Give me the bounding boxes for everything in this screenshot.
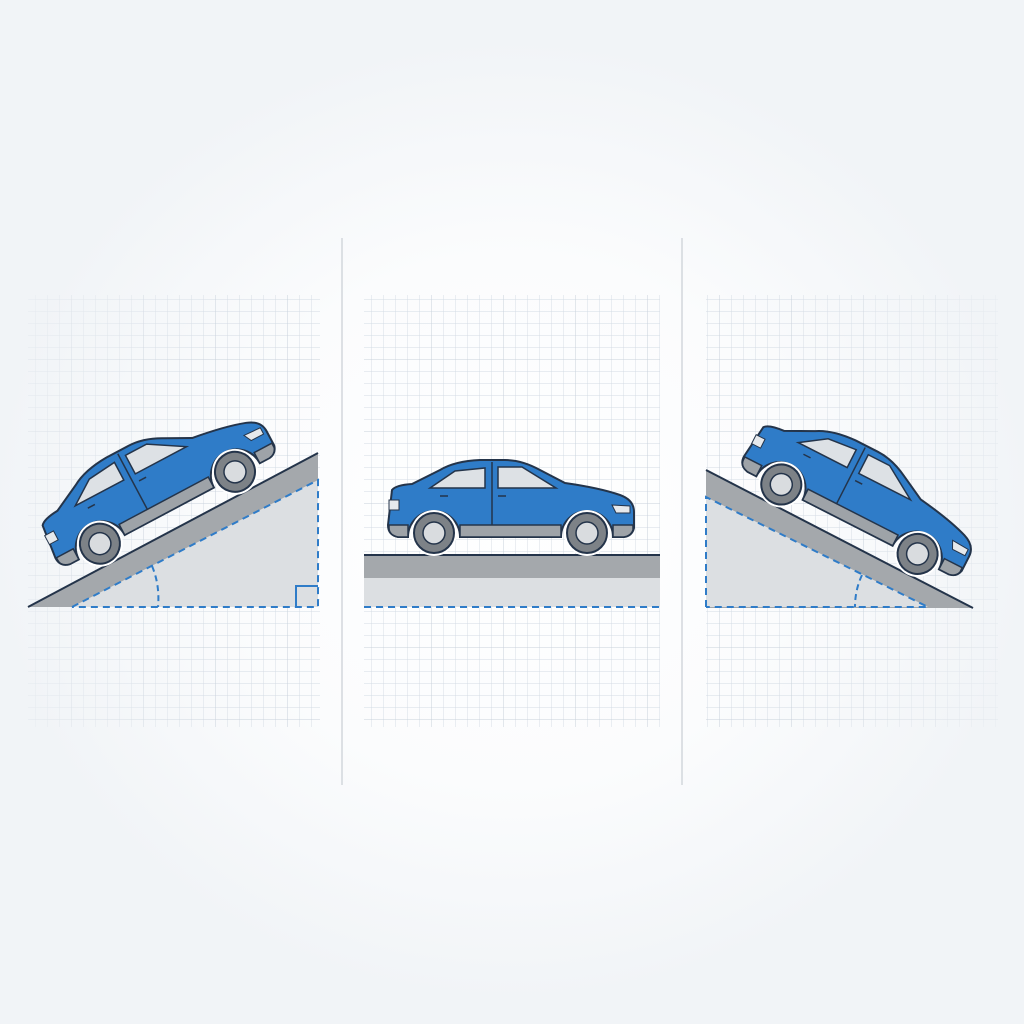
car flat	[388, 460, 634, 556]
downhill ramp	[706, 470, 973, 608]
panel: downhill	[706, 399, 993, 608]
panel: uphill	[25, 385, 318, 607]
grid backgrounds	[28, 295, 998, 727]
flat road	[364, 555, 660, 607]
car uphill	[25, 385, 287, 586]
panel: flat	[364, 460, 660, 607]
dividers	[341, 238, 343, 785]
uphill ramp	[28, 453, 318, 607]
car downhill	[730, 399, 993, 596]
